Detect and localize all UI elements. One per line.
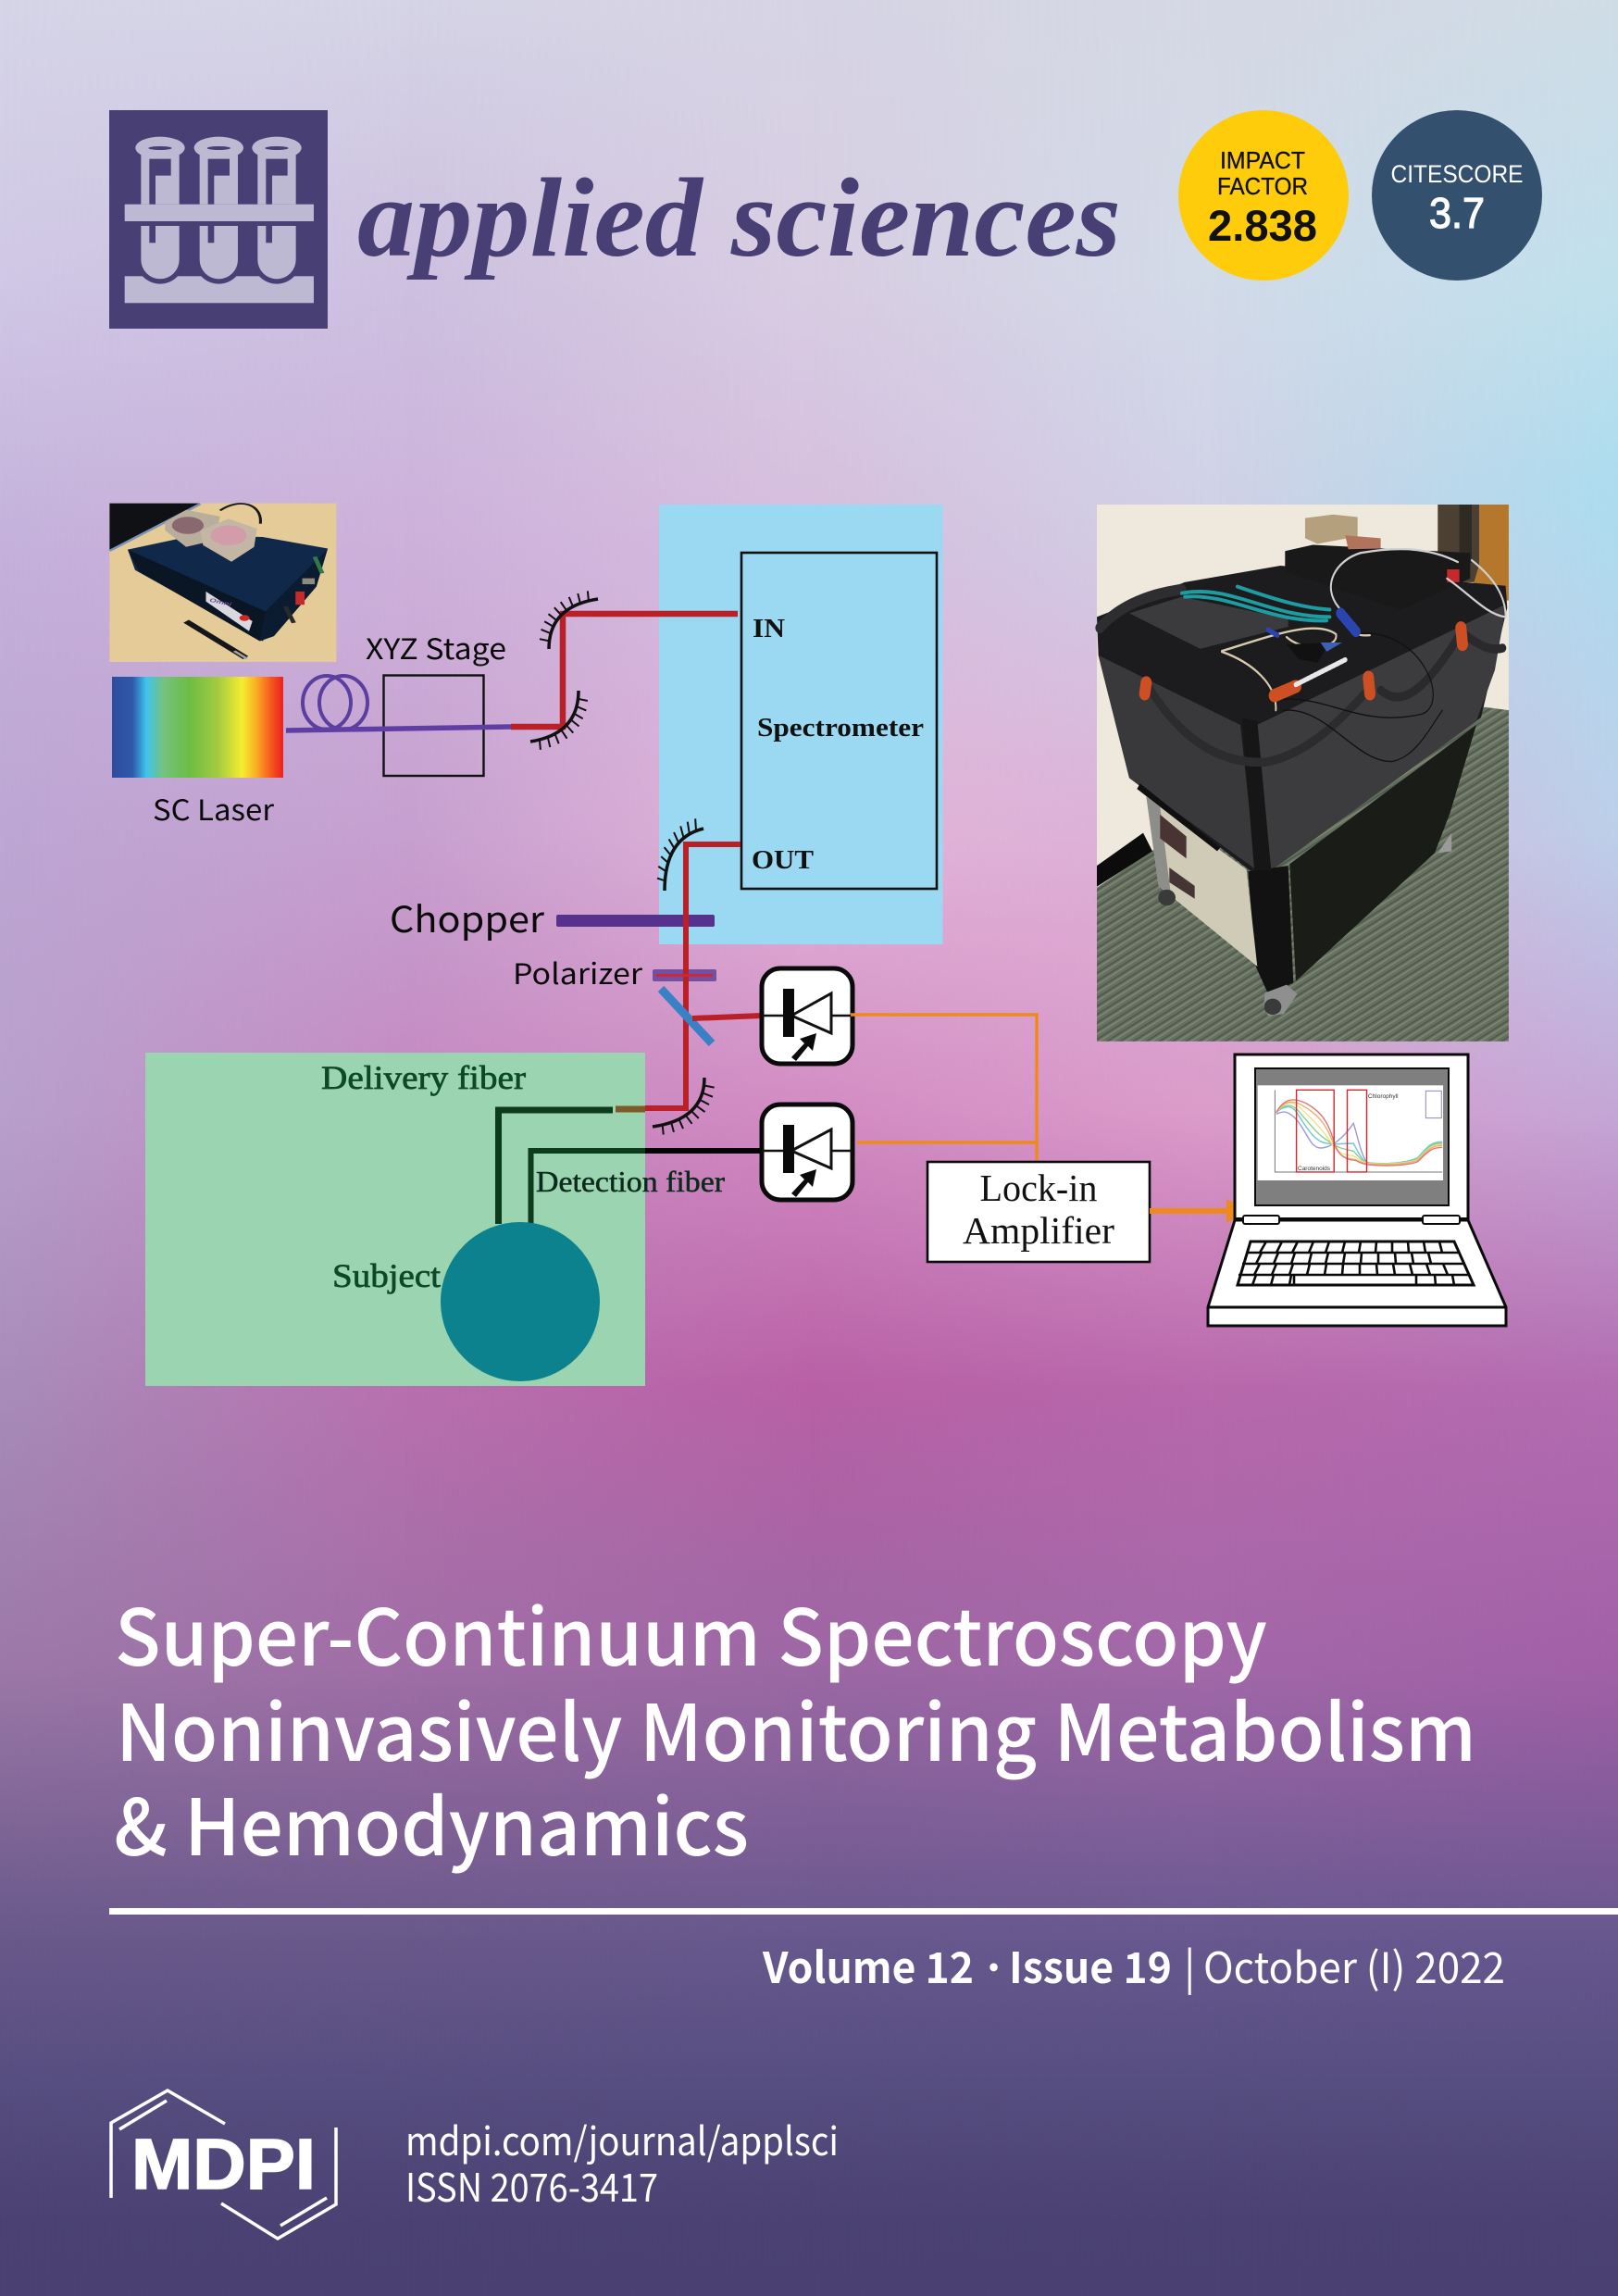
subject circle	[441, 1222, 600, 1381]
polarizer bar	[653, 969, 716, 981]
label: chopper: Chopper	[390, 892, 545, 943]
delivery fiber	[498, 1110, 613, 1224]
volume and date: Volume 12	[762, 1935, 974, 1996]
title: & Hemodynamics	[114, 1766, 749, 1878]
spectrometer labels	[752, 614, 924, 875]
MDPI logo: MDPI	[131, 2125, 316, 2204]
lock-in amplifier box	[927, 1162, 1150, 1262]
photo: SC laser: Omni	[208, 597, 233, 607]
spectrometer labels: Spectrometer	[757, 714, 924, 742]
photo: SC laser	[109, 504, 336, 662]
photo: instrument cart	[1097, 505, 1509, 1042]
title: Noninvasively Monitoring Metabolism	[116, 1672, 1476, 1784]
journal URL and ISSN: mdpi.com/journal/applsci	[405, 2111, 839, 2167]
beam splitter	[661, 989, 712, 1043]
beam: red path to spectrometer	[511, 614, 738, 727]
detection fiber outside panel	[645, 1148, 762, 1154]
detector 1	[762, 968, 853, 1064]
lock-in amplifier box: Amplifier	[963, 1209, 1114, 1252]
orange arrow to laptop	[1150, 1204, 1242, 1218]
label: detection fiber: Detection fiber	[536, 1165, 725, 1198]
badge: citescore: CITESCORE	[1390, 160, 1524, 188]
mirror: lower	[530, 691, 588, 750]
laptop	[1208, 1054, 1506, 1326]
label: delivery fiber: Delivery fiber	[321, 1059, 526, 1096]
beam over green	[616, 1105, 645, 1113]
badge: impact factor: FACTOR	[1217, 172, 1308, 200]
badge: citescore: 3.7	[1429, 189, 1485, 237]
orange signal lines	[851, 1015, 1037, 1162]
chopper bar	[556, 915, 715, 927]
rule	[109, 1908, 1618, 1915]
spectrometer box	[741, 553, 937, 889]
label: polarizer: Polarizer	[513, 951, 643, 992]
laptop screen	[1255, 1068, 1449, 1205]
beam: red path to subject	[645, 844, 741, 1108]
volume and date: Issue 19	[1009, 1935, 1172, 1996]
spectrometer labels: IN	[753, 614, 785, 643]
laptop hinges	[1243, 1216, 1279, 1224]
fiber coil	[303, 676, 367, 730]
badge: impact factor: IMPACT	[1220, 146, 1305, 174]
badge: impact factor	[1178, 110, 1349, 281]
laptop base	[1208, 1220, 1506, 1326]
title	[114, 1577, 1476, 1878]
journal URL and ISSN	[405, 2111, 839, 2214]
mirror: delivery	[653, 1078, 715, 1134]
title: Super-Continuum Spectroscopy	[115, 1577, 1267, 1689]
journal name: applied sciences	[357, 156, 1121, 281]
label: SC laser: SC Laser	[153, 787, 275, 829]
XYZ stage box	[383, 676, 483, 776]
MDPI logo	[111, 2090, 336, 2239]
beam: purple fiber	[286, 727, 511, 730]
polarizer inner line	[656, 974, 713, 977]
panel: subject background	[145, 1053, 645, 1386]
journal URL and ISSN: ISSN 2076-3417	[405, 2157, 658, 2214]
volume and date: October (I) 2022	[1203, 1935, 1505, 1996]
detector 2	[762, 1104, 853, 1200]
chart label: carotenoids: Carotenoids	[1298, 1166, 1331, 1172]
badge: citescore	[1372, 110, 1542, 281]
laptop screen chart	[1258, 1085, 1443, 1180]
panel: spectrometer background	[659, 505, 942, 944]
label: subject: Subject	[332, 1257, 441, 1294]
laptop lid	[1235, 1054, 1468, 1222]
volume and date: ·	[981, 1935, 1006, 1996]
journal logo: test tubes	[109, 110, 328, 329]
laptop keyboard	[1238, 1242, 1474, 1285]
volume and date	[762, 1935, 1505, 1996]
mirror: top	[540, 591, 598, 649]
beam: red branch to detector	[692, 1016, 762, 1018]
badge: impact factor: 2.838	[1208, 201, 1317, 250]
detection fiber	[531, 1151, 762, 1224]
SC laser spectrum	[112, 677, 283, 778]
lock-in amplifier box: Lock-in	[979, 1167, 1098, 1209]
chart label: chlorophyll: Chlorophyll	[1368, 1093, 1399, 1100]
label: XYZ stage: XYZ Stage	[366, 626, 506, 668]
spectrometer labels: OUT	[752, 845, 814, 875]
mirror: spectrometer output	[657, 818, 703, 891]
volume and date: |	[1184, 1935, 1195, 1996]
